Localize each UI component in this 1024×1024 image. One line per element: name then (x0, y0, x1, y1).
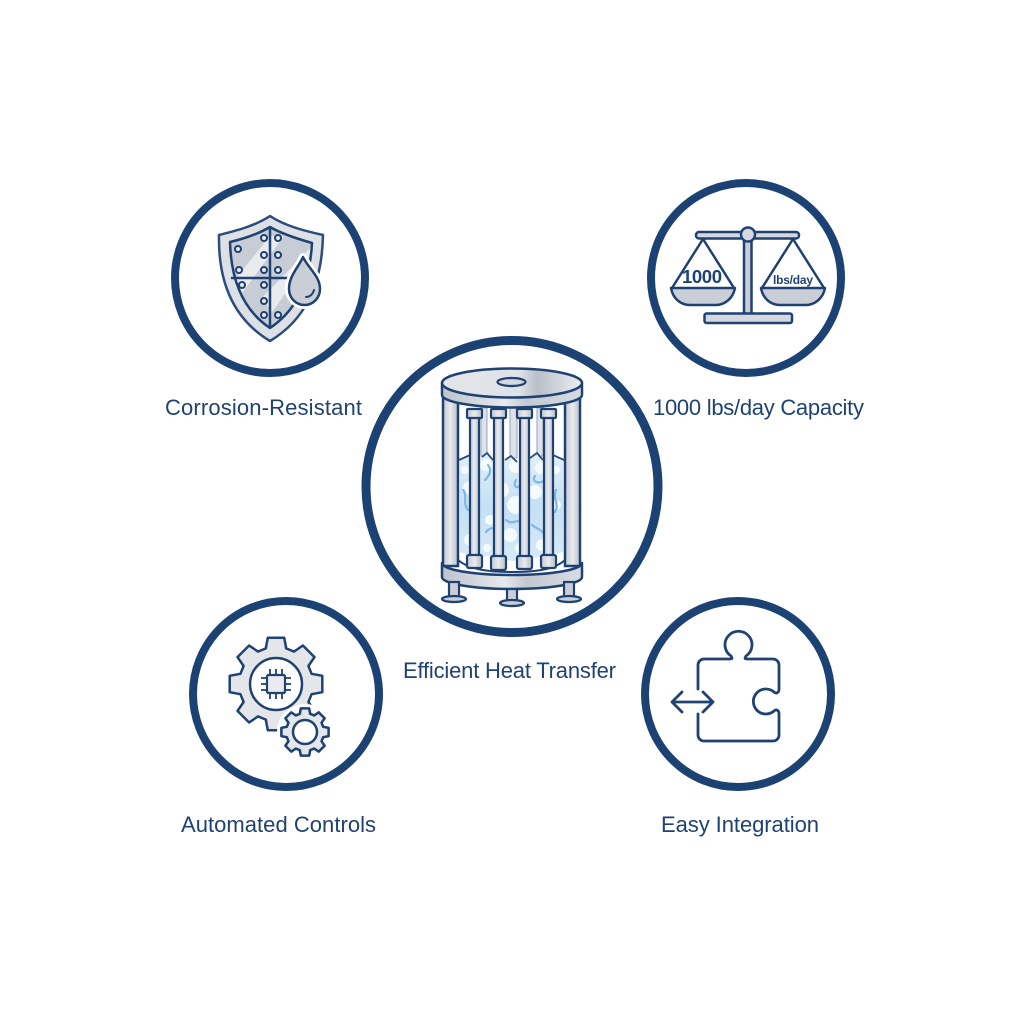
icon: gears with chip (230, 638, 333, 760)
icon: puzzle piece with arrow (672, 631, 779, 741)
ice and water core (459, 453, 564, 561)
label: corrosion-resistant: Corrosion-Resistant (165, 395, 362, 420)
panel: capacity (651, 183, 864, 420)
panel: automated controls (181, 601, 379, 837)
top cap (442, 383, 582, 408)
infographic (166, 179, 864, 836)
feet (442, 582, 581, 606)
ring: center (366, 340, 658, 632)
panel: efficient heat transfer (366, 340, 658, 683)
side posts (443, 398, 580, 566)
tubes (467, 409, 556, 570)
label: automated controls: Automated Controls (181, 812, 376, 837)
icon: shield with water drop (219, 216, 323, 341)
icon: heat exchanger vessel (442, 368, 582, 606)
panel: corrosion-resistant (165, 183, 365, 420)
ring: automated controls (193, 601, 379, 787)
scale text: 1000: 1000 (682, 266, 722, 287)
label: efficient heat transfer: Efficient Heat Transfer (403, 658, 616, 683)
ring: capacity (651, 183, 841, 373)
scale text: lbs/day: lbs/day (773, 273, 813, 287)
back rods (481, 408, 543, 458)
label: easy integration: Easy Integration (661, 812, 819, 837)
icon: balance scale (671, 228, 825, 323)
ring: corrosion-resistant (175, 183, 365, 373)
panel: easy integration (645, 601, 831, 837)
label: capacity: 1000 lbs/day Capacity (653, 395, 864, 420)
ring: easy integration (645, 601, 831, 787)
bottom ring (442, 563, 582, 589)
